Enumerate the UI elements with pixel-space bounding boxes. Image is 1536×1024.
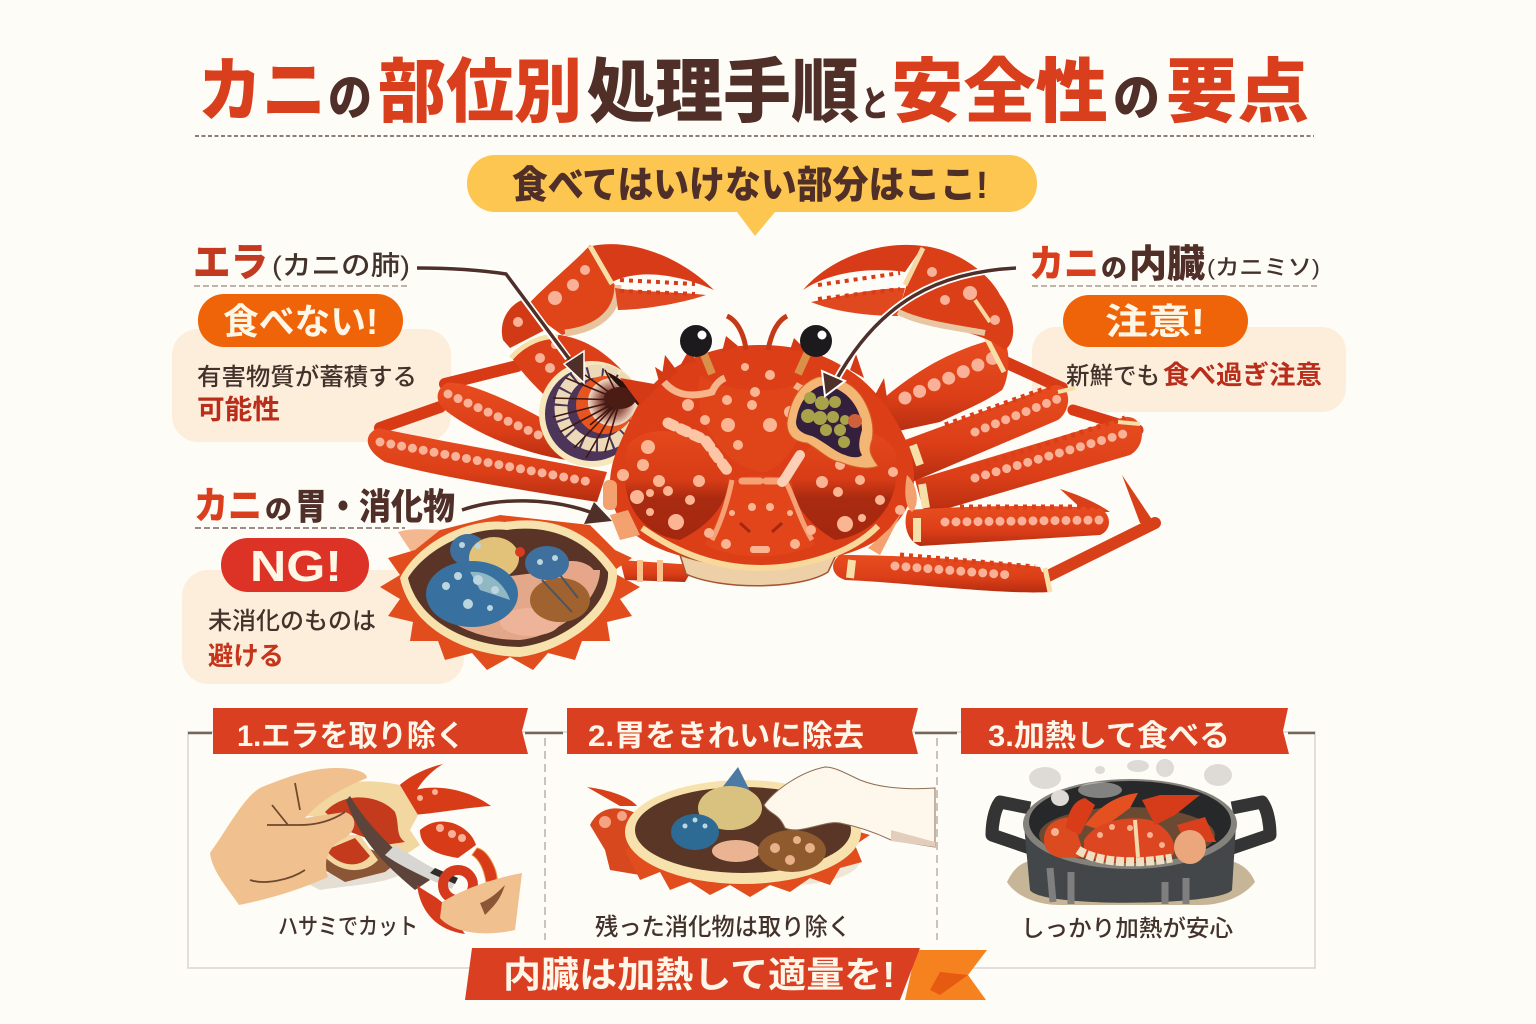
title: 要点 [1166,53,1309,131]
crab shell lobes [625,431,728,540]
step 3 banner: 3.加熱して食べる [988,720,1230,753]
note: innards [1066,360,1322,390]
label: innards: 内臓 [1129,244,1205,286]
illustration: step 2 shell and hand [587,767,935,897]
badge: caution: 注意! [1105,301,1205,342]
title: 処理手順 [587,53,859,131]
crab spines [620,336,888,405]
title: の [1113,70,1160,126]
label: gills [193,241,410,286]
title: の [328,70,372,126]
crab eyes [680,325,832,374]
crab carapace [610,345,914,566]
label: stomach: の [265,495,292,525]
note: gills: 有害物質が蓄積する [197,364,417,391]
crab antennae [727,316,787,350]
arrow: stomach [462,501,612,524]
note: stomach: 避ける [208,641,284,671]
note: gills [197,364,417,425]
caption: step 1: ハサミでカット [278,913,418,939]
badge: do not eat [198,294,403,347]
note: innards: 食べ過ぎ注意 [1163,360,1322,390]
crab legs right [833,362,1155,592]
hand [210,768,367,905]
caption: step 2: 残った消化物は取り除く [595,914,851,941]
step 2 banner: 2.胃をきれいに除去 [588,720,864,753]
step 2 banner [567,708,918,754]
title: カニ [198,52,326,130]
title [198,52,1309,131]
gill cutaway [539,361,645,467]
crab left arm and claw [445,366,517,384]
arrow: innards [822,268,1016,396]
badge: NG [221,538,369,592]
crab leg plates [603,475,917,555]
step 1 banner [213,708,528,754]
shell [308,840,400,882]
badge: NG: NG! [250,542,342,591]
innards cutaway [787,377,878,468]
label: innards [1029,244,1320,286]
panel: gill note background [172,329,451,442]
note: stomach [208,608,376,671]
label: stomach: 胃・消化物 [295,486,455,527]
note: stomach: 未消化のものは [208,608,376,635]
scissors [346,796,430,890]
illustration: stomach cutaway [380,515,640,670]
speech bubble heading: 食べてはいけない部分はここ! [512,165,988,207]
panel: innards note background [1032,327,1346,412]
title: 安全性 [891,53,1108,131]
bottom banner [465,948,987,1000]
badge: caution [1063,295,1248,347]
crab right arm and claw [868,338,1008,435]
arrow: gills [417,268,584,383]
bottom banner: 内臓は加熱して適量を! [503,954,895,995]
panel: stomach note background [182,570,464,684]
label: gills: (カニの肺) [272,251,410,281]
label: innards: (カニミソ) [1207,255,1320,280]
label: gills: エラ [193,241,268,285]
caption: step 3: しっかり加熱が安心 [1021,915,1233,941]
title: 部位別 [378,53,582,131]
note: innards: 新鮮でも [1066,363,1160,390]
crab underside plate [680,555,836,586]
step 3 banner [961,708,1289,754]
panel: steps frame [188,732,1315,968]
crab legs behind shell [395,764,443,805]
illustration: crab [368,244,1155,592]
title: と [861,83,889,124]
label: stomach: カニ [194,486,262,528]
step 1 banner: 1.エラを取り除く [237,720,465,753]
note: gills: 可能性 [197,395,280,425]
badge: do not eat: 食べない! [223,301,378,342]
illustration: step 3 pot [992,759,1270,905]
label: innards: の [1101,253,1127,283]
speech bubble heading [467,155,1037,236]
illustration: step 1 hand and scissors [210,764,522,934]
label: innards: カニ [1029,244,1099,286]
label: stomach [194,486,455,528]
crab shell dots [617,363,905,553]
crab leg joints [850,388,1140,592]
